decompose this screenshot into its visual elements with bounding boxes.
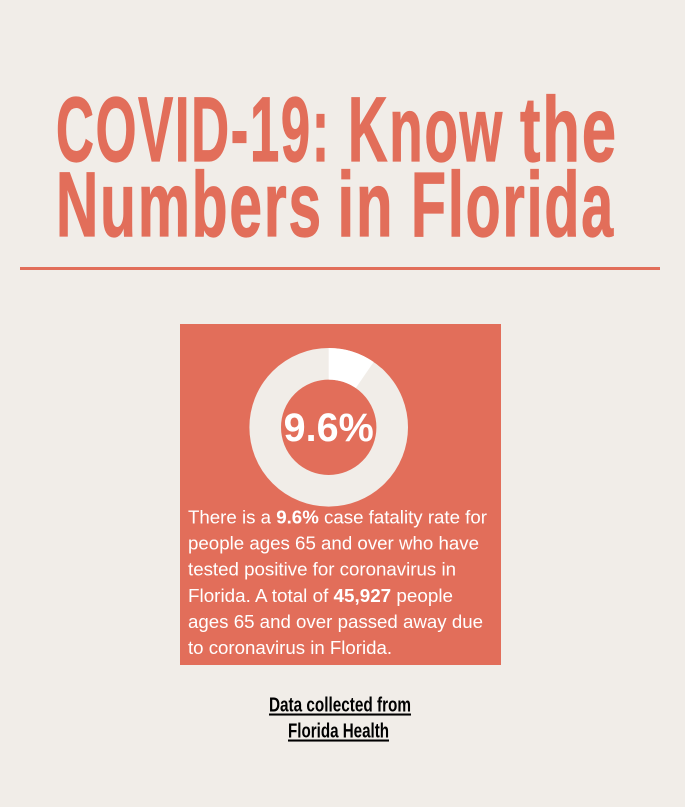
description text	[188, 506, 487, 658]
title: the	[520, 79, 618, 181]
title: Numbers	[56, 154, 323, 256]
description text: to coronavirus in Florida.	[188, 637, 392, 658]
title	[56, 79, 618, 256]
description text: Florida. A total of 45,927 people	[188, 585, 453, 606]
source note: Florida Health	[288, 720, 389, 742]
title: COVID-19:	[56, 79, 331, 181]
description text: people ages 65 and over who have	[188, 532, 479, 554]
description text: There is a 9.6% case fatality rate for	[188, 506, 487, 527]
source note: Data collected from	[269, 694, 411, 716]
title: in	[338, 154, 394, 256]
title: Know	[348, 79, 504, 181]
donut chart: 9.6%	[265, 348, 392, 491]
source note	[269, 694, 411, 742]
description text: ages 65 and over passed away due	[188, 611, 483, 632]
description text: tested positive for coronavirus in	[188, 559, 456, 580]
donut value: 9.6%	[284, 406, 374, 450]
panel: case fatality rate	[180, 324, 501, 665]
